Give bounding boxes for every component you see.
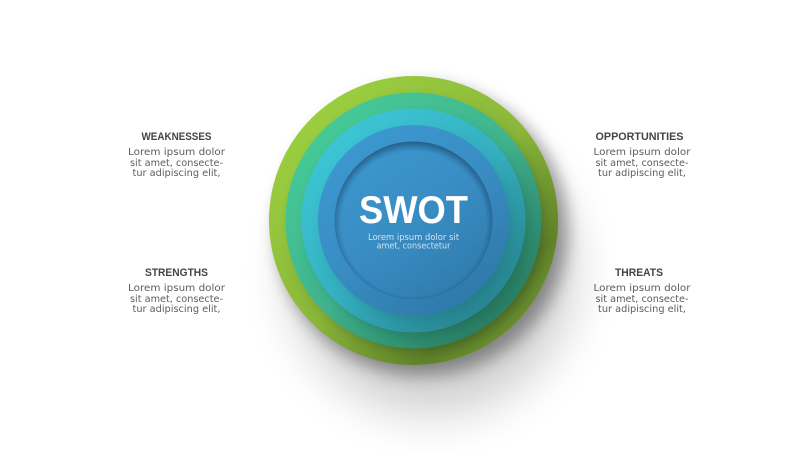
text block: strengths: Lorem ipsum dolor (128, 283, 226, 294)
centre title: SWOT (359, 189, 468, 232)
centre text: Lorem ipsum dolor sit (368, 233, 460, 243)
ring: green (269, 76, 558, 365)
text block: weaknesses: tur adipiscing elit, (132, 168, 220, 179)
text block: opportunities: OPPORTUNITIES (596, 131, 684, 143)
text block: threats (594, 267, 691, 315)
ring: cyan (302, 108, 526, 332)
text block: threats: THREATS (615, 267, 663, 279)
text block: weaknesses: Lorem ipsum dolor (128, 147, 226, 158)
centre text: amet, consectetur (376, 242, 451, 252)
ring: teal (286, 92, 542, 348)
text block: strengths: STRENGTHS (145, 267, 208, 279)
shadow: teal ring (297, 106, 543, 352)
text block: strengths (128, 267, 226, 315)
text block: weaknesses (128, 131, 226, 179)
text block: weaknesses: sit amet, consecte- (130, 158, 223, 169)
text block: opportunities (594, 131, 691, 179)
text block: threats: sit amet, consecte- (596, 294, 689, 305)
drop shadow (276, 84, 574, 414)
text block: threats: Lorem ipsum dolor (594, 283, 691, 294)
ring: blue (318, 125, 509, 316)
centre text (368, 233, 460, 252)
text block: weaknesses: WEAKNESSES (142, 131, 212, 143)
text block: strengths: tur adipiscing elit, (132, 304, 220, 315)
shadow: cyan ring (312, 121, 526, 335)
text block: opportunities: Lorem ipsum dolor (594, 147, 691, 158)
shadow: blue ring (327, 136, 509, 318)
text block: opportunities: tur adipiscing elit, (598, 168, 686, 179)
concentric circles (269, 76, 558, 365)
centre disc (334, 142, 492, 300)
text block: threats: tur adipiscing elit, (598, 304, 686, 315)
text block: strengths: sit amet, consecte- (130, 294, 223, 305)
text block: opportunities: sit amet, consecte- (596, 158, 689, 169)
